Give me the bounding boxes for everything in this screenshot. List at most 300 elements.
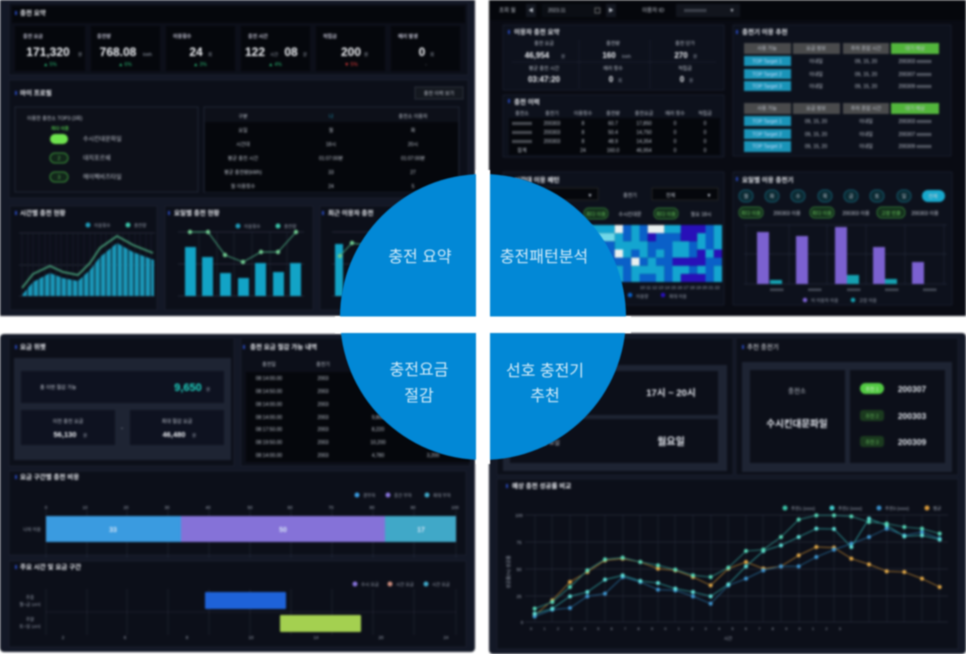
- chart: hourly charging: 충전량: [134, 222, 146, 228]
- chart: cost share stacked bar: 30: [164, 505, 170, 510]
- panel: charging pattern analysis: [489, 0, 966, 316]
- chart: fee band timeline: 주중: [26, 595, 34, 601]
- panel: savings table: 1,330: [427, 440, 439, 446]
- chart: cost share stacked bar: 100: [451, 505, 459, 510]
- station pills: 최다 이용: [51, 125, 69, 132]
- panel: time usage heatmap: 전체: [666, 192, 676, 199]
- panel: savings table: 08:14:00.00: [256, 376, 282, 382]
- panel: fee savings: 총 이번 절감 가능: [40, 384, 77, 391]
- panel: time usage heatmap: 최대 이용: [669, 293, 687, 300]
- chart: fee band timeline: 24: [443, 635, 449, 640]
- chart: expected charging success rate: 75: [516, 540, 522, 545]
- recommendation table 1: 09, 15, 20: [855, 59, 877, 65]
- chart: fee band timeline: 시간 요금: [396, 581, 414, 587]
- panel: savings table: 충전기: [316, 361, 330, 368]
- comparison table: 01:07:00분: [319, 156, 343, 162]
- comparison table: 평균 충전량(kWh): [224, 169, 262, 176]
- KPI cards: kWh: [143, 52, 152, 57]
- fee widget title: 요금 위젯: [20, 342, 46, 351]
- chart: expected charging success rate: 추천2 (xxxx): [838, 505, 863, 512]
- panel: fee savings: 최대 절감 요금: [162, 418, 193, 425]
- panel: savings table: 2003: [317, 427, 329, 433]
- panel: charging history: 17,850: [636, 121, 652, 127]
- panel: preferred time and day: 월요일: [657, 435, 685, 448]
- charger ids: [860, 383, 926, 447]
- comparison table: 충전소 이용자: [398, 113, 428, 120]
- chart: weekday charging: [168, 208, 304, 296]
- heatmap cells: [590, 229, 722, 278]
- chart: weekday charging: 충전량: [284, 223, 296, 229]
- panel: time usage heatmap: 충전기: [623, 192, 637, 199]
- chart: cost share stacked bar: 중간 부하: [394, 492, 413, 499]
- chart: cost share stacked bar: 90: [410, 505, 416, 510]
- history button: 충전 이력 보기: [424, 90, 454, 97]
- chart: hourly charging: [15, 208, 155, 296]
- panel: user summary: 회: [618, 77, 622, 84]
- panel: user summary: 0: [609, 75, 614, 84]
- panel: user summary: 충전량: [606, 40, 620, 47]
- green tags: 200303 이용: [911, 210, 939, 217]
- panel: fee savings: 이전 충전 요금: [53, 418, 84, 425]
- recommendation table 2: 09, 15, 20: [805, 144, 827, 150]
- comparison table: 월: [329, 127, 334, 134]
- panel: charging history: 충전량: [606, 110, 620, 117]
- panel: charging history: 0: [704, 148, 707, 154]
- panel: charging history: 충전 이력: [514, 97, 540, 106]
- panel: preferred charger recommendation: [489, 333, 966, 654]
- panel: savings table: 08:14:00.00: [256, 402, 282, 408]
- station pills: 수시킨대문파일: [83, 135, 122, 143]
- chart: fee band timeline: 20: [378, 635, 384, 640]
- recommendation table 2: TOP Target 2: [752, 132, 782, 138]
- panel: charging history: 0: [674, 139, 677, 145]
- bar chart: charger usage: xxxxxx: [923, 287, 937, 292]
- KPI cards: 시간: [270, 51, 278, 57]
- panel: preferred time and day: 17시 ~ 20시: [646, 388, 696, 399]
- panel: user summary: 원: [693, 53, 697, 59]
- panel: savings table: 2003: [317, 389, 329, 395]
- weekday selector: 일: [902, 193, 907, 200]
- bar chart: charger usage: xxxxxx: [808, 287, 822, 292]
- panel: top stations: 이용한 충전소 TOP3 (3회): [27, 115, 83, 122]
- summary header: 충전 요약: [20, 8, 46, 17]
- filter bar: ▶: [608, 8, 614, 14]
- recommendation table 1: 200307 xxxxxx: [898, 72, 932, 78]
- panel: savings table: [243, 342, 470, 462]
- profile title: 마이 프로필: [20, 88, 52, 97]
- panel: top stations: [15, 107, 198, 192]
- KPI cards: 회: [430, 51, 434, 58]
- comparison table: 24: [328, 184, 334, 190]
- panel: charging history: 에러 횟수: [665, 110, 685, 117]
- panel: savings table: 2003: [317, 453, 329, 459]
- KPI cards: ▲ 5%: [43, 62, 57, 68]
- panel: user summary: [503, 25, 724, 90]
- bar chart: charger usage: [744, 225, 947, 304]
- charger ids: 200303: [898, 411, 926, 421]
- KPI cards: 충전량: [97, 33, 111, 40]
- panel: time usage heatmap: 수시킨대문: [618, 211, 642, 218]
- panel: charging history: 200303: [544, 139, 561, 145]
- chart: expected charging success rate: 100: [515, 513, 523, 518]
- label: preferred charger recommendation: 선호 충전기: [506, 362, 584, 380]
- panel: fee savings: 원: [192, 432, 196, 438]
- panel: charging history: 14,750: [636, 130, 652, 136]
- chart: expected charging success rate: 50: [516, 567, 522, 572]
- KPI cards: ▲ 6%: [118, 62, 132, 68]
- comparison table: 화: [411, 128, 416, 134]
- chart: fee band timeline: [15, 562, 456, 640]
- KPI cards: ▼ 5%: [344, 62, 358, 68]
- panel: charging fee reduction: [0, 334, 475, 652]
- fee widget title: [15, 342, 46, 351]
- panel: user summary: 적립금: [678, 65, 692, 72]
- recommendation table 2: 200309 xxxxxx: [898, 144, 932, 150]
- panel: charging history: [503, 95, 724, 157]
- recommendation table 2: [744, 103, 939, 152]
- chart: expected charging success rate: 평균: [933, 505, 941, 511]
- recommendation table 1: 09, 15, 20: [855, 72, 877, 78]
- chart: cost share stacked bar: 40: [205, 505, 211, 510]
- filter bar: 이용자 ID: [642, 6, 664, 14]
- summary header: [12, 6, 465, 23]
- center circle: [335, 170, 631, 464]
- charger ids: 추천 1: [865, 386, 879, 393]
- green tags: 200303 이용: [842, 210, 870, 217]
- panel: charging history: 8: [582, 121, 585, 127]
- panel: charging history: 0: [704, 121, 707, 127]
- panel: recommended charger: 추천 충전기: [747, 342, 779, 351]
- chart: cost share stacked bar: 0: [45, 505, 48, 510]
- panel: weekday chargers: 요일별 이용 충전기: [742, 175, 793, 184]
- recommendation table 2: 대기 예상: [905, 105, 925, 112]
- panel: charging history: 8: [582, 139, 585, 145]
- station pills: [50, 125, 122, 182]
- panel: fee savings: 46,480: [163, 430, 185, 439]
- KPI cards: 분: [303, 52, 307, 57]
- chart: fee band timeline: 2: [62, 635, 65, 640]
- panel: weekday chargers: [733, 172, 952, 305]
- panel: savings table: 2003: [317, 402, 329, 408]
- panel: charging history: 0: [674, 130, 677, 136]
- panel: savings table: 2003: [317, 415, 329, 421]
- KPI cards: ▲ 4%: [268, 62, 282, 68]
- KPI cards: 0: [419, 45, 426, 59]
- recommendation table 1: 주차 혼잡 시간: [851, 45, 882, 52]
- panel: charger recommendation: 충전기 이용 추천: [742, 27, 787, 36]
- comparison table: 시간대: [236, 141, 250, 148]
- panel: charging history: 8: [582, 130, 585, 136]
- panel: time usage heatmap: 월요 18시: [691, 211, 711, 218]
- green tags: 200303 이용: [773, 210, 801, 217]
- chart: fee band timeline: 토~일 14시: [19, 623, 41, 629]
- panel: charging history: 0: [674, 148, 677, 154]
- recommendation table 2: 이내일: [859, 118, 873, 125]
- recommendation table 2: TOP Target 1: [752, 119, 782, 125]
- chart: weekly usage: 최근 이용자 충전: [328, 208, 373, 217]
- recommendation table 1: 대기 예상: [905, 45, 925, 52]
- recommendation table 2: TOP Target 3: [752, 144, 782, 150]
- panel: time usage heatmap: 시간대 이용 패턴: [514, 175, 559, 184]
- recommendation table 2: 사용 가능: [757, 105, 777, 112]
- chart: cost share stacked bar: 요금 구간별 충전 비용: [20, 472, 79, 481]
- panel: user summary: 충전 요금: [534, 40, 554, 47]
- panel: charging history: 합계: [517, 147, 527, 154]
- recommendation table 1: 이내일: [809, 71, 823, 78]
- KPI cards: 충전 요금: [23, 33, 43, 40]
- panel: savings table: 08:19:50.00: [256, 440, 282, 446]
- panel: fee savings: [14, 358, 231, 460]
- recommendation table 2: 200303 xxxxxx: [898, 119, 932, 125]
- charger ids: 추천 2: [865, 413, 879, 420]
- panel: charging history: 0: [704, 139, 707, 145]
- filter bar: [489, 0, 966, 20]
- filter bar: ▼: [730, 8, 734, 14]
- KPI cards: 200: [341, 45, 361, 59]
- panel: time usage heatmap: 이용량: [636, 293, 648, 300]
- chart: weekday charging: 요일별 충전 현황: [174, 208, 219, 217]
- chart: cost share stacked bar: 20: [123, 505, 129, 510]
- filter bar: xxxxxxxxx: [684, 8, 707, 14]
- comparison table: 구분: [238, 114, 248, 120]
- chart: cost share stacked bar: 50: [279, 527, 287, 534]
- station pills: 3: [58, 175, 61, 181]
- chart: cost share stacked bar: 70: [328, 505, 334, 510]
- panel: fee savings: 9,650: [174, 382, 202, 394]
- KPI cards: 원: [78, 51, 82, 57]
- recommendation table 1: 09, 15, 20: [855, 84, 877, 90]
- chart: fee band timeline: 주말: [26, 616, 34, 623]
- chart: weekly usage: [322, 208, 452, 296]
- panel: charging history: 200303: [544, 130, 561, 136]
- chart: cost share stacked bar: 80: [369, 505, 375, 510]
- panel: user summary: 03:47:20: [528, 75, 561, 84]
- profile title: [15, 88, 52, 97]
- chart: fee band timeline: 8: [186, 635, 189, 640]
- weekday selector: 전체: [928, 193, 938, 200]
- KPI cards: 원: [364, 51, 368, 57]
- KPI cards: 회: [208, 51, 212, 58]
- KPI cards: -: [425, 62, 427, 68]
- chart: cost share stacked bar: 60: [287, 505, 293, 510]
- label: charging pattern analysis: 충전패턴분석: [500, 248, 588, 266]
- panel: charging history: xxxxxxxx: [512, 121, 532, 127]
- panel: user summary: 46,954: [525, 51, 550, 60]
- charger ids: 200309: [898, 437, 926, 447]
- panel: user summary: 0: [680, 75, 685, 84]
- bar chart: charger usage: 이 이용자 이용: [811, 297, 838, 304]
- panel: fee savings: 원: [206, 386, 210, 392]
- panel: charging history: 60.7: [608, 121, 618, 127]
- history button: [415, 87, 463, 99]
- panel: savings table: 8,220: [372, 427, 384, 433]
- panel: time usage heatmap: ▼: [707, 193, 711, 199]
- weekday selector: 금: [849, 194, 854, 200]
- station pills: 2: [58, 156, 61, 162]
- bar chart: charger usage: xxxxxx: [885, 287, 899, 292]
- panel: time usage heatmap: [503, 172, 724, 305]
- comparison table: 33: [328, 170, 334, 176]
- KPI cards: ▲ 3%: [193, 62, 207, 68]
- weekday selector: [739, 190, 945, 202]
- panel: charging history: 적립금: [698, 110, 712, 117]
- panel: savings table: 충전일: [262, 361, 276, 368]
- chart: cost share stacked bar: 33: [109, 527, 117, 534]
- comparison table: 요일: [238, 127, 248, 134]
- bar chart: charger usage: xxxxxx: [770, 287, 784, 292]
- panel: savings table: 3,200: [427, 453, 439, 459]
- recommendation table 2: 200307 xxxxxx: [898, 132, 932, 138]
- panel: savings table: 08:14:00.00: [256, 453, 282, 459]
- panel: time usage heatmap: 최다 이용: [656, 211, 676, 218]
- chart: fee band timeline: 수시 요금: [361, 582, 379, 588]
- chart: fee band timeline: 10: [248, 635, 254, 640]
- chart: hourly charging: 이용횟수: [94, 222, 111, 229]
- panel: savings table: 9,800: [372, 415, 384, 421]
- chart: fee band timeline: 6: [124, 635, 127, 640]
- chart: cost share stacked bar: 50: [247, 505, 253, 510]
- chart: cost share stacked bar: 나의 이용: [23, 526, 41, 533]
- chart: fee band timeline: 월~금 14시: [19, 601, 41, 608]
- weekday selector: 토: [875, 194, 880, 200]
- station pills: 대치포르쉐: [83, 154, 111, 162]
- panel: fee savings: 원: [83, 432, 87, 438]
- recommendation table 2: 주차 혼잡 시간: [851, 105, 882, 112]
- panel: savings table: 2003: [317, 440, 329, 446]
- KPI cards: 122: [245, 45, 265, 59]
- KPI cards: 08: [284, 45, 298, 59]
- recommendation table 1: 요금 정보: [806, 45, 826, 52]
- KPI cards: 171,320: [26, 45, 70, 59]
- panel: fee savings: -: [121, 426, 123, 432]
- chart: cost share stacked bar: 10: [82, 505, 88, 510]
- recommendation table 2: 이내일: [859, 131, 873, 138]
- chart: cost share stacked bar: 최대 부하: [433, 492, 452, 499]
- chart: fee band timeline: 주요 시간 및 요금 구간: [20, 562, 81, 571]
- panel: savings table: 충전 요금 절감 가능 내역: [250, 342, 317, 351]
- panel: charging history: 24: [580, 148, 586, 154]
- panel: charging history: 200303: [544, 121, 561, 127]
- charger ids: 추천 3: [865, 439, 879, 446]
- recommendation table 1: 200309 xxxxxx: [898, 84, 932, 90]
- comparison table: 01:07:00분: [401, 156, 425, 162]
- weekday selector: 목: [823, 194, 828, 200]
- comparison table: 나: [329, 113, 334, 120]
- panel: preferred time and day: [503, 365, 727, 471]
- chart: hourly charging: 시간별 충전 현황: [20, 208, 65, 217]
- panel: charging history: xxxxxxxx: [512, 139, 532, 145]
- panel: savings table: 4,780: [372, 453, 384, 459]
- panel: recommended charger: [742, 342, 952, 472]
- panel: user summary: 원: [561, 53, 565, 59]
- chart: expected charging success rate: 예상 충전 성공률 비교: [512, 481, 571, 490]
- comparison table: 18시: [326, 142, 336, 148]
- panel: user summary: 평균 충전 시간: [529, 65, 560, 72]
- panel: savings table: 10,200: [370, 440, 386, 446]
- recommendation table 1: 사용 가능: [757, 45, 777, 52]
- recommendation table 1: 이내일: [809, 58, 823, 65]
- panel: user summary: 충전 단가: [675, 40, 695, 47]
- bar chart: charger usage: 고장 이용: [859, 297, 877, 304]
- label: preferred charger recommendation: 추천: [530, 387, 560, 405]
- panel: recommended charger: 충전소: [788, 386, 806, 395]
- panel: charging history: 충전요금: [635, 110, 654, 117]
- panel: recommended charger: 수시킨대문파일: [766, 418, 828, 430]
- recommendation table 2: 이내일: [859, 143, 873, 150]
- recommendation table 1: 200303 xxxxxx: [898, 59, 932, 65]
- recommendation table 1: TOP Target 2: [752, 72, 782, 78]
- chart: expected charging success rate: 추천1 (xxxx): [791, 505, 816, 512]
- chart: expected charging success rate: 012345678901234567890123: [530, 626, 852, 631]
- filter bar: ◀: [528, 8, 534, 14]
- panel: user summary: 270: [674, 51, 688, 60]
- recommendation table 2: 09, 15, 20: [805, 119, 827, 125]
- KPI cards: 적립금: [323, 33, 337, 40]
- charger ids: 200307: [898, 384, 926, 394]
- KPI cards: 에러 발생: [398, 33, 418, 40]
- panel: user summary: 이용자 충전 요약: [514, 27, 559, 36]
- weekday selector: 수: [796, 194, 801, 200]
- panel: time usage heatmap: 최다 이용: [586, 211, 606, 218]
- green tags: [739, 207, 939, 218]
- panel: user summary: 에러 횟수: [603, 65, 623, 72]
- KPI cards: 이용횟수: [173, 33, 192, 40]
- panel: charging history: 160.0: [607, 148, 619, 154]
- panel: charging history: 48.9: [608, 139, 618, 145]
- green tags: 최다 이용: [741, 210, 761, 217]
- chart: fee band timeline: 시간 요금: [432, 581, 450, 587]
- chart: expected charging success rate: 추천3 (xxxx): [885, 505, 910, 512]
- panel: charging history: 0: [704, 130, 707, 136]
- panel: charging history: xxxxxxxx: [512, 130, 532, 136]
- comparison table: 5: [412, 184, 415, 190]
- panel: user summary: kWh: [622, 54, 631, 59]
- green tags: 최다 이용: [812, 210, 832, 217]
- recommendation table 2: 09, 15, 20: [805, 132, 827, 138]
- recommendation table 1: TOP Target 1: [752, 59, 782, 65]
- panel: charger recommendation: [733, 25, 951, 156]
- panel: savings table: 08:14:00.00: [256, 415, 282, 421]
- label: fee reduction: [390, 361, 448, 405]
- panel: charging history: 이용횟수: [574, 110, 593, 117]
- panel: charging history: 0: [674, 121, 677, 127]
- recommendation table 1: 이내일: [809, 83, 823, 90]
- filter bar: 조회 월: [499, 6, 516, 14]
- comparison table: 27: [410, 170, 416, 176]
- success rate lines: [535, 515, 940, 616]
- KPI cards: [15, 26, 460, 71]
- chart: cost share stacked bar: 17: [417, 527, 425, 534]
- panel: fee savings: 56,130: [54, 430, 76, 439]
- filter bar: 2023.11: [548, 8, 566, 14]
- chart: expected charging success rate: 시간: [724, 635, 732, 641]
- weekday selector: 월: [744, 193, 749, 200]
- panel: savings table: 08:14:50.00: [256, 389, 282, 395]
- chart: cost share stacked bar: 경부하: [363, 492, 376, 499]
- panel: user summary: 원: [689, 77, 693, 83]
- recommendation table 1: TOP Target 3: [752, 84, 782, 90]
- comparison table: [204, 107, 459, 192]
- KPI cards: 768.08: [100, 45, 137, 59]
- chart: fee band timeline: 14: [313, 635, 319, 640]
- comparison table: 월 이용횟수: [231, 183, 256, 190]
- comparison table: 20시: [408, 142, 418, 148]
- label: preferred charger recommendation: [506, 362, 584, 405]
- bar chart: charger usage: xxxxxx: [847, 287, 861, 292]
- chart: cost share stacked bar: [15, 472, 459, 558]
- panel: preferred time and day: 선호 요일: [536, 439, 560, 447]
- panel: savings table: 2003: [317, 376, 329, 382]
